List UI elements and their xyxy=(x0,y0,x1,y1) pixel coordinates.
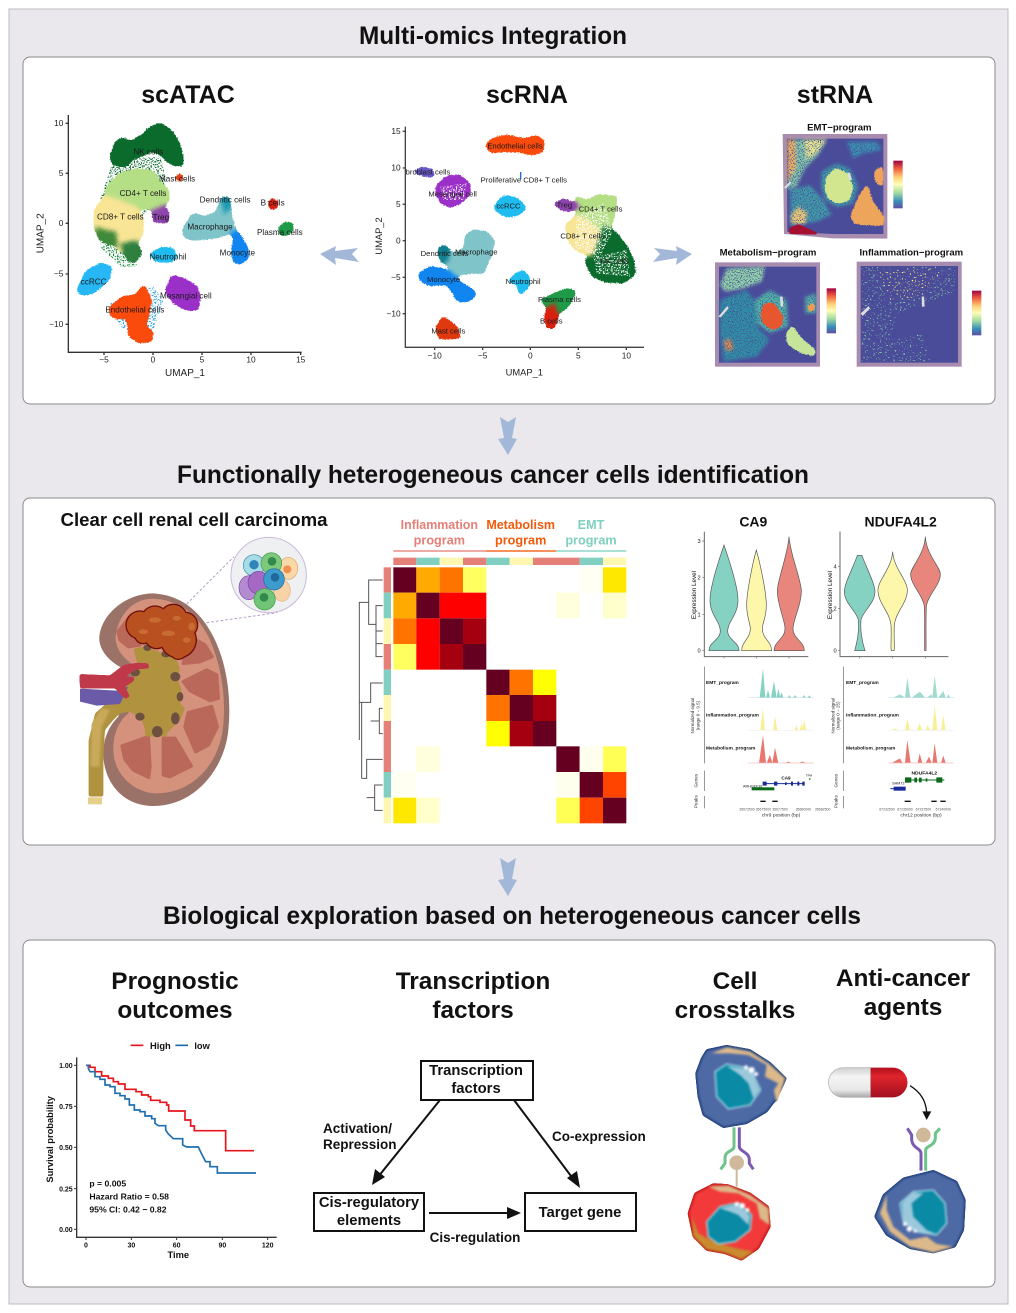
legend: program headers xyxy=(393,518,626,552)
chart: scATAC UMAP: −10 xyxy=(49,319,64,329)
coverage tracks: NDUFA4L2: Inflammation_program xyxy=(846,713,899,719)
title: biological exploration: Biological exploration based on heterogeneous cancer cells xyxy=(163,902,861,930)
chart: scATAC UMAP: 10 xyxy=(246,355,256,365)
legend: program headers: program xyxy=(565,533,617,547)
heading: anti-cancer agents: agents xyxy=(864,994,942,1021)
chart: Kaplan-Meier survival: Hazard Ratio = 0.58 xyxy=(89,1192,169,1202)
chart: scRNA UMAP: Monocyte xyxy=(427,275,460,284)
chart: scRNA UMAP: Plasma cells xyxy=(538,295,581,304)
coverage tracks: NDUFA4L2: 67240000 xyxy=(936,807,951,811)
chart: scRNA UMAP: ccRCC xyxy=(496,202,521,211)
box: target gene: Target gene xyxy=(539,1205,621,1221)
coverage tracks: NDUFA4L2: Peaks xyxy=(834,795,839,808)
coverage tracks: CA9: Metabolism_program xyxy=(706,745,756,751)
icon: capsule xyxy=(828,1068,907,1097)
heading: transcription factors: Transcription xyxy=(396,968,550,995)
chart: scRNA UMAP: 0 xyxy=(396,235,401,245)
chart: scATAC UMAP: Macrophage xyxy=(187,222,233,231)
label: cis-regulation: Cis-regulation xyxy=(430,1230,520,1245)
arrow: activation/repression xyxy=(372,1100,440,1185)
chart: scRNA UMAP: B cells xyxy=(540,317,563,326)
arrow: scRNA to scATAC xyxy=(320,246,359,265)
heatmap cells xyxy=(393,567,626,823)
chart: scRNA UMAP: 5 xyxy=(396,199,401,209)
violin plot: CA9: 0 xyxy=(698,649,701,655)
coverage tracks: NDUFA4L2 xyxy=(830,667,954,818)
chart: correlation heatmap xyxy=(359,518,626,823)
legend: program headers: Metabolism xyxy=(486,518,555,532)
chart: scRNA UMAP: −10 xyxy=(428,351,442,361)
chart: scATAC UMAP: Plasma cells xyxy=(257,228,303,237)
violin plot: NDUFA4L2 xyxy=(827,514,948,658)
chart: scRNA UMAP: CD4+ T cells xyxy=(579,205,623,214)
map: Metabolism program xyxy=(715,247,836,367)
cells inset xyxy=(187,537,306,623)
chart: scATAC UMAP: B cells xyxy=(261,199,285,208)
coverage tracks: CA9: 35682500 xyxy=(815,807,830,811)
heading: clear cell renal cell carcinoma: Clear cell renal cell carcinoma xyxy=(60,510,329,530)
coverage tracks: CA9: ARHGEF39 xyxy=(743,784,762,788)
heading: cell crosstalks: crosstalks xyxy=(675,997,795,1024)
legend: low xyxy=(194,1041,211,1051)
heading: transcription factors: factors xyxy=(432,997,514,1024)
map: Inflammation program xyxy=(857,247,981,367)
chart: scATAC UMAP: ccRCC xyxy=(81,278,107,287)
chart: scRNA UMAP: 0 xyxy=(528,351,533,361)
chart: stRNA spatial maps xyxy=(715,123,981,367)
chart: Kaplan-Meier survival: Time xyxy=(168,1250,189,1260)
coverage tracks: CA9: 35677500 xyxy=(772,807,788,811)
violin plot: CA9: 1 xyxy=(698,612,701,618)
box: transcription factors: Transcription xyxy=(429,1063,523,1079)
chart: scRNA UMAP: UMAP_2 xyxy=(374,217,384,255)
chart: scRNA UMAP: Neutrophil xyxy=(506,277,541,286)
heading: stRNA: stRNA xyxy=(797,81,873,109)
coverage tracks: CA9: chr9 position (bp) xyxy=(762,812,801,818)
chart: scRNA UMAP: −10 xyxy=(387,308,401,318)
arrow: down to identification xyxy=(498,417,517,455)
chart: scATAC UMAP: Monocyte xyxy=(220,248,255,257)
chart: Kaplan-Meier survival: p = 0.005 xyxy=(89,1178,126,1188)
arrow: capsule to receptor xyxy=(910,1086,931,1120)
coverage tracks: NDUFA4L2: (range 0 − 25) xyxy=(836,701,841,730)
panel: functionally heterogeneous cancer cells xyxy=(23,498,995,845)
arrow: cis-regulation xyxy=(429,1207,521,1219)
icon: receptor ligand top xyxy=(721,1127,753,1187)
chart: Kaplan-Meier survival: 0.50 xyxy=(59,1145,73,1152)
chart: scRNA UMAP: Mesangial cell xyxy=(428,190,477,199)
chart: scRNA UMAP: −5 xyxy=(391,272,401,282)
legend: High xyxy=(150,1041,171,1051)
violin plot: NDUFA4L2: NDUFA4L2 xyxy=(865,514,937,530)
heading: cell crosstalks: Cell xyxy=(713,968,757,995)
chart: scATAC UMAP: 10 xyxy=(54,118,64,128)
chart: CA9 and NDUFA4L2 expression and tracks xyxy=(690,514,954,818)
coverage tracks: CA9: 35672500 xyxy=(739,807,755,811)
chart: scATAC UMAP: Mesangial cell xyxy=(160,291,212,300)
chart: scATAC UMAP: −5 xyxy=(54,269,64,279)
chart: scRNA UMAP: 10 xyxy=(391,163,401,173)
chart: scRNA UMAP xyxy=(374,126,644,378)
box: target gene xyxy=(525,1193,636,1231)
violin plot: NDUFA4L2: 0 xyxy=(834,649,837,655)
chart: Kaplan-Meier survival: 95% CI: 0.42 − 0.82 xyxy=(89,1205,167,1215)
chart: scATAC UMAP: 5 xyxy=(200,355,205,365)
panel: biological exploration xyxy=(23,940,995,1287)
chart: scRNA UMAP: Treg xyxy=(557,200,572,209)
chart: scATAC UMAP: 0 xyxy=(59,218,64,228)
map: Metabolism program: Metabolism−program xyxy=(720,247,816,258)
map: EMT program xyxy=(783,123,903,239)
heading: scATAC: scATAC xyxy=(141,81,235,109)
icon: receptor ligand bottom xyxy=(907,1128,940,1171)
label: activation/repression: Activation/ xyxy=(323,1121,392,1136)
coverage tracks: NDUFA4L2: Normalized signal xyxy=(830,698,835,733)
chart: Kaplan-Meier survival: 60 xyxy=(173,1242,181,1249)
icon: blue cell bottom xyxy=(875,1171,965,1253)
coverage tracks: CA9: CA9 xyxy=(781,776,791,781)
box: cis-regulatory elements: elements xyxy=(337,1213,401,1229)
violin plot: CA9: 3 xyxy=(698,539,701,545)
chart: scATAC UMAP: 0 xyxy=(151,355,156,365)
heading: prognostic outcomes: Prognostic xyxy=(111,968,239,995)
chart: Kaplan-Meier survival: 0 xyxy=(84,1242,88,1249)
tumour xyxy=(125,604,198,660)
chart: Kaplan-Meier survival: 30 xyxy=(127,1242,135,1249)
coverage tracks: CA9: 35680000 xyxy=(796,807,811,811)
violin plot: CA9: 2 xyxy=(698,576,701,582)
coverage tracks: NDUFA4L2: NDUFA4L2 xyxy=(911,771,937,777)
violin plot: NDUFA4L2: Expression Level xyxy=(827,571,834,619)
violin plot: NDUFA4L2: 4 xyxy=(834,565,837,571)
chart: scATAC UMAP: Dendritic cells xyxy=(200,195,250,204)
coverage tracks: CA9: Inflammation_program xyxy=(706,713,759,719)
label: co-expression: Co-expression xyxy=(552,1129,646,1144)
coverage tracks: CA9 xyxy=(690,667,830,818)
legend: program headers: EMT xyxy=(578,518,605,532)
heading: anti-cancer agents: Anti-cancer xyxy=(836,965,970,992)
panel: multi-omics integration xyxy=(23,57,995,404)
violin plot: NDUFA4L2: 2 xyxy=(834,607,837,613)
arrow: down to biological exploration xyxy=(498,858,517,896)
legend: program headers: program xyxy=(495,533,546,547)
chart: Kaplan-Meier survival xyxy=(45,1041,277,1260)
chart: scRNA UMAP: −5 xyxy=(478,351,488,361)
chart: scRNA UMAP: NK cells xyxy=(601,256,629,265)
chart: scATAC UMAP: CD8+ T cells xyxy=(97,212,144,221)
chart: Kaplan-Meier survival: 0.75 xyxy=(59,1104,73,1111)
chart: Kaplan-Meier survival: 1.00 xyxy=(59,1063,73,1070)
chart: scRNA UMAP: 10 xyxy=(622,351,631,361)
chart: scATAC UMAP: NK cells xyxy=(133,148,163,157)
chart: scATAC UMAP: Mast cells xyxy=(159,175,195,184)
coverage tracks: NDUFA4L2: EMT_program xyxy=(846,680,879,686)
violin plot: CA9: Expression Level xyxy=(691,571,698,619)
chart: scRNA UMAP: Proliferative CD8+ T cells xyxy=(481,176,567,185)
coverage tracks: CA9: Genes xyxy=(694,773,699,788)
box: transcription factors xyxy=(421,1061,533,1100)
box: cis-regulatory elements: Cis-regulatory xyxy=(319,1195,420,1211)
chart: scRNA UMAP: Dendritic cells xyxy=(421,249,468,258)
coverage tracks: NDUFA4L2: 67235000 xyxy=(897,807,913,811)
box: cis-regulatory elements xyxy=(314,1193,424,1231)
chart: scRNA UMAP: UMAP_1 xyxy=(506,368,543,378)
coverage tracks: NDUFA4L2: chr12 position (bp) xyxy=(900,812,942,818)
legend xyxy=(131,1041,211,1051)
diagram: transcription factor regulation xyxy=(314,1061,646,1245)
map: Inflammation program: Inflammation−program xyxy=(859,247,963,258)
chart: Kaplan-Meier survival: 120 xyxy=(262,1242,274,1249)
arrow: co-expression xyxy=(514,1100,580,1188)
illustration: cell crosstalk and anti-cancer agent xyxy=(688,1046,965,1260)
chart: scRNA UMAP: Endothelial cells xyxy=(487,142,543,151)
chart: Kaplan-Meier survival: 0.25 xyxy=(59,1186,73,1193)
chart: scRNA UMAP: Macrophage xyxy=(455,248,498,257)
coverage tracks: NDUFA4L2: SHMT2 xyxy=(892,782,905,786)
chart: scATAC UMAP: UMAP_2 xyxy=(36,213,47,253)
chart: scATAC UMAP: Neutrophil xyxy=(149,252,187,261)
chart: scRNA UMAP: 5 xyxy=(576,351,581,361)
chart: scRNA UMAP: broblast cells xyxy=(406,167,451,176)
violin plot: CA9 xyxy=(691,514,808,658)
coverage tracks: NDUFA4L2: 67232500 xyxy=(879,807,895,811)
chart: scATAC UMAP: 15 xyxy=(296,355,306,365)
chart: scATAC UMAP: Treg xyxy=(153,213,170,222)
coverage tracks: CA9: 35675000 xyxy=(756,807,771,811)
title: functionally heterogeneous cancer cells identification: Functionally heterogeneous cancer cells identification xyxy=(177,461,809,489)
legend: program headers: program xyxy=(414,533,465,547)
chart: scATAC UMAP xyxy=(36,115,306,379)
coverage tracks: CA9: Peaks xyxy=(694,795,699,808)
chart: scRNA UMAP: 15 xyxy=(391,126,401,136)
heading: prognostic outcomes: outcomes xyxy=(117,997,233,1024)
chart: Kaplan-Meier survival: 0.00 xyxy=(59,1227,73,1234)
label: activation/repression: Repression xyxy=(323,1137,397,1152)
coverage tracks: CA9: EMT_program xyxy=(706,680,739,686)
chart: scATAC UMAP: CD4+ T cells xyxy=(120,189,166,198)
chart: scRNA UMAP: Mast cells xyxy=(431,326,466,335)
illustration: kidney with tumour xyxy=(79,537,306,806)
dendrogram xyxy=(359,580,383,810)
chart: scATAC UMAP: −5 xyxy=(99,355,109,365)
coverage tracks: NDUFA4L2: 67237500 xyxy=(916,807,931,811)
map: EMT program: EMT−program xyxy=(807,123,872,134)
box: transcription factors: factors xyxy=(451,1081,501,1097)
legend: program headers: Inflammation xyxy=(401,518,478,532)
violin plot: CA9: CA9 xyxy=(739,514,768,530)
chart: Kaplan-Meier survival: 90 xyxy=(218,1242,226,1249)
heading: scRNA: scRNA xyxy=(486,81,568,109)
chart: scATAC UMAP: UMAP_1 xyxy=(165,368,205,379)
chart: scRNA UMAP: CD8+ T cells xyxy=(560,232,604,241)
coverage tracks: CA9: Normalized signal xyxy=(690,698,695,733)
chart: scATAC UMAP: Endothelial cells xyxy=(105,306,164,315)
coverage tracks: NDUFA4L2: Metabolism_program xyxy=(846,745,896,751)
chart: scATAC UMAP: 5 xyxy=(59,168,64,178)
coverage tracks: NDUFA4L2: Genes xyxy=(834,773,839,788)
icon: red cell xyxy=(688,1184,770,1260)
arrow: scRNA to stRNA xyxy=(653,246,692,265)
title: multi-omics integration: Multi-omics Integration xyxy=(359,22,627,50)
chart: Kaplan-Meier survival: Survival probability xyxy=(45,1095,55,1183)
coverage tracks: CA9: TPM xyxy=(806,774,813,778)
coverage tracks: CA9: (range 0 − 9.5) xyxy=(695,700,700,730)
icon: blue cell top xyxy=(696,1046,786,1127)
